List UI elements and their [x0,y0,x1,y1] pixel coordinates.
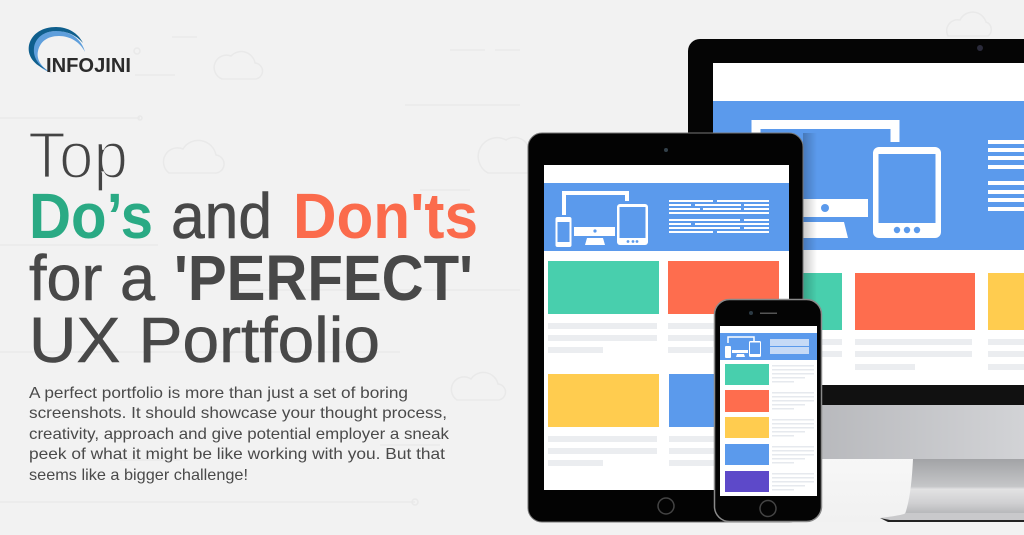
desktop monitor [688,39,1024,522]
icon: monitor outline [756,124,895,145]
monitor hero band [713,101,1024,250]
logo name: INFOJINI [46,55,131,77]
monitor body [688,39,1024,459]
phone [714,300,822,522]
title line: UX Portfolio: UX Portfolio [29,304,380,376]
icon: phone [556,217,572,247]
monitor stand [760,459,1024,522]
logo: Infojini [29,27,131,77]
icon: monitor base [574,227,615,245]
phone camera and speaker [749,311,777,315]
monitor chin [700,405,1024,459]
icon: text lines [988,142,1024,209]
phone home button [760,500,776,516]
title [28,118,478,376]
icon: tablet [873,147,941,238]
tablet hero band [544,183,789,251]
phone screen [720,326,817,496]
icon: text lines [669,201,769,232]
tablet screen [544,165,789,490]
title line: Do's and Don'ts: Don'ts [293,180,478,252]
monitor screen [713,63,1024,385]
monitor camera [977,45,983,51]
intro paragraph: peek of what it might be like working with you. But that [29,446,446,463]
tablet camera [664,148,668,152]
title line: for a PERFECT: 'PERFECT' [174,242,473,314]
title line: Do's and Don'ts: and [171,180,272,252]
title line: for a PERFECT: for a [29,242,155,314]
phone content cards [725,364,814,492]
title line: Do's and Don'ts [29,180,478,252]
icon: tablet [617,204,648,245]
title line: Top: Top [28,118,128,192]
logo swoosh [29,27,85,73]
monitor content cards [780,273,1024,370]
intro paragraph: creativity, approach and give potential employer a sneak [29,426,450,443]
icon: monitor outline [564,193,627,215]
intro paragraph: A perfect portfolio is more than just a set of boring [29,385,408,402]
tablet home button [658,498,674,514]
intro paragraph [29,385,450,484]
title line: for a PERFECT [29,242,473,314]
tablet [528,133,803,522]
phone body [714,300,822,522]
phone hero band [720,333,817,360]
tablet shadow on monitor [803,133,817,518]
intro paragraph: screenshots. It should showcase your thought process, [29,405,447,422]
tablet content cards [548,261,779,466]
intro paragraph: seems like a bigger challenge! [29,467,248,484]
icon: monitor base [800,199,868,238]
tablet body [528,133,803,522]
title line: Do's and Don'ts: Do’s [29,180,153,252]
